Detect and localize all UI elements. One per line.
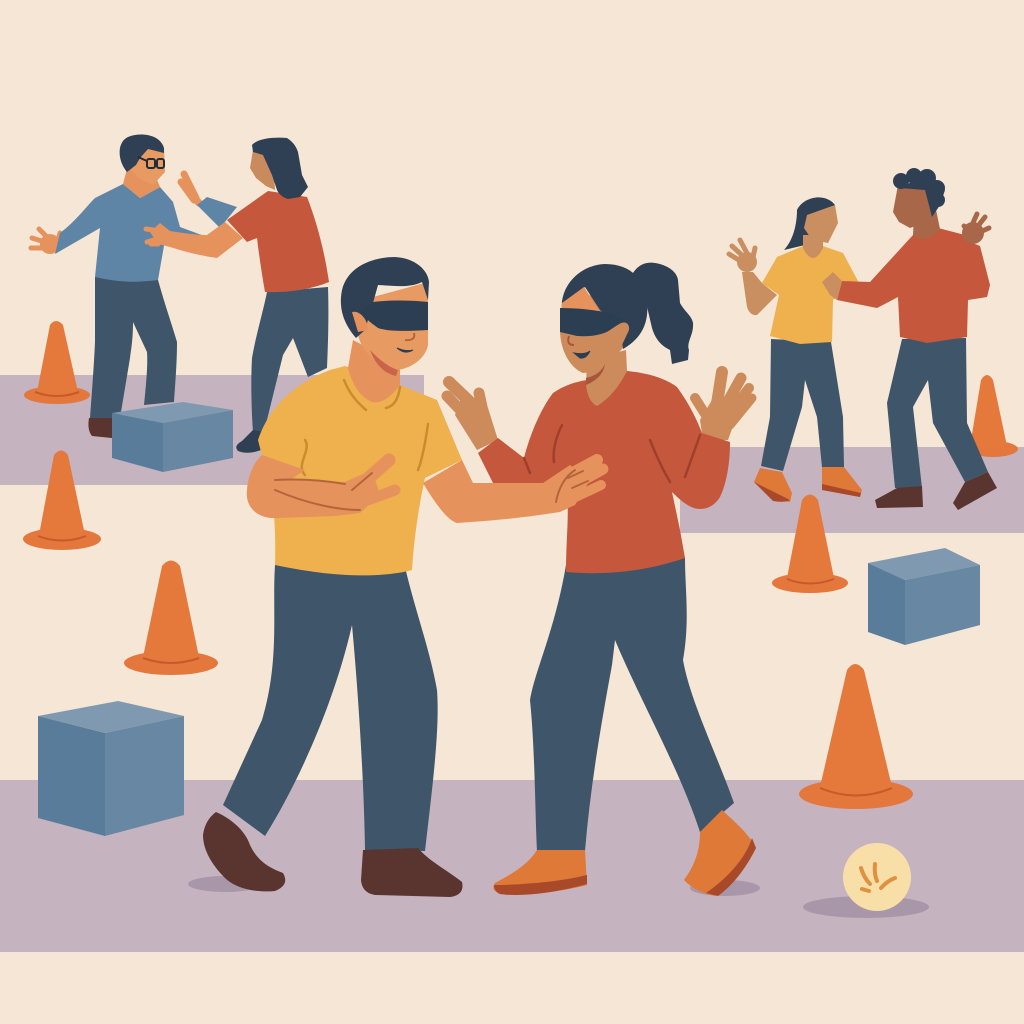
collar and fold lines bbox=[302, 380, 428, 475]
pants bbox=[251, 287, 328, 432]
arm and hand bbox=[146, 222, 243, 258]
cone: far right bbox=[968, 375, 1018, 457]
shoes bbox=[875, 486, 923, 508]
shoes bbox=[754, 467, 862, 502]
shoe bbox=[88, 418, 112, 438]
hand bbox=[729, 240, 757, 272]
shoe shadows bbox=[188, 876, 760, 896]
shirt bbox=[762, 246, 858, 344]
cone: right foreground bbox=[799, 664, 913, 809]
cone: left lower bbox=[124, 560, 218, 675]
nose bbox=[568, 336, 574, 345]
neck shadow bbox=[370, 350, 398, 376]
shirt bbox=[837, 228, 990, 343]
figure: man in blue, background left bbox=[31, 135, 207, 438]
face bbox=[127, 148, 165, 185]
figure: main man, blindfolded, yellow shirt bbox=[203, 257, 603, 897]
cone: right middle bbox=[772, 494, 848, 593]
raised hand bbox=[962, 214, 989, 244]
right shoe bbox=[684, 810, 756, 896]
blue sleeve bbox=[197, 197, 237, 228]
shirt bbox=[227, 191, 329, 292]
neck bbox=[803, 235, 823, 258]
mouth bbox=[397, 348, 413, 352]
face bbox=[560, 290, 625, 373]
jaw shadow bbox=[586, 364, 605, 385]
hair back bbox=[784, 197, 835, 250]
mouth bbox=[574, 351, 590, 358]
neck bbox=[123, 165, 160, 198]
left hand bbox=[447, 382, 498, 450]
pants bbox=[761, 339, 844, 471]
fold lines bbox=[524, 425, 700, 482]
hair bbox=[341, 257, 429, 338]
shoe bbox=[236, 430, 265, 453]
face bbox=[358, 282, 428, 370]
face bbox=[893, 185, 932, 228]
nose bbox=[405, 333, 414, 340]
blindfold bbox=[358, 300, 428, 331]
ball with shadow bbox=[803, 843, 929, 918]
face bbox=[804, 205, 838, 243]
neck bbox=[348, 340, 400, 402]
figure: man in red, background right bbox=[822, 168, 997, 510]
pants bbox=[223, 565, 438, 851]
floor band: upper left bbox=[0, 375, 424, 485]
forearm and hand on chest bbox=[247, 455, 395, 518]
cone: left middle bbox=[23, 450, 101, 550]
figure: main woman, blindfolded, red shirt bbox=[447, 263, 756, 896]
reaching arm and hand bbox=[423, 460, 603, 523]
hair bbox=[252, 138, 308, 199]
right hand bbox=[695, 372, 752, 440]
neck bbox=[586, 350, 627, 406]
raised hand bbox=[181, 174, 200, 204]
floor band: foreground bbox=[0, 780, 1024, 952]
pants bbox=[530, 558, 734, 851]
figure: woman in yellow, background right bbox=[729, 197, 862, 502]
hair bbox=[893, 168, 945, 217]
shirt bbox=[55, 184, 207, 282]
left shoe bbox=[203, 812, 285, 891]
hair bbox=[120, 135, 164, 172]
right shoe bbox=[361, 848, 462, 897]
blindfold bbox=[560, 308, 625, 336]
ponytail bbox=[633, 263, 693, 364]
hand on partner bbox=[822, 272, 842, 300]
chest hand lines bbox=[275, 473, 372, 510]
head bbox=[250, 148, 275, 190]
ear bbox=[613, 322, 629, 345]
glasses bbox=[138, 157, 164, 168]
left shoe bbox=[493, 850, 587, 895]
pants bbox=[887, 338, 988, 488]
cone: upper left bbox=[24, 321, 90, 404]
shirt bbox=[478, 371, 730, 573]
shirt bbox=[258, 366, 462, 575]
box: foreground left bbox=[38, 701, 184, 836]
floor band: upper right bbox=[680, 447, 1024, 533]
figure: woman in red, background left bbox=[146, 138, 329, 453]
neck bbox=[913, 205, 940, 239]
arm bbox=[742, 272, 777, 315]
forehead bbox=[562, 287, 600, 312]
reach hand lines bbox=[556, 470, 588, 502]
hand bbox=[31, 229, 60, 254]
sleeve edge cover bbox=[965, 240, 990, 290]
ear bbox=[352, 312, 368, 332]
box: back left bbox=[112, 402, 233, 472]
pants bbox=[90, 277, 177, 418]
hair bbox=[562, 264, 647, 349]
box: right bbox=[868, 548, 980, 645]
